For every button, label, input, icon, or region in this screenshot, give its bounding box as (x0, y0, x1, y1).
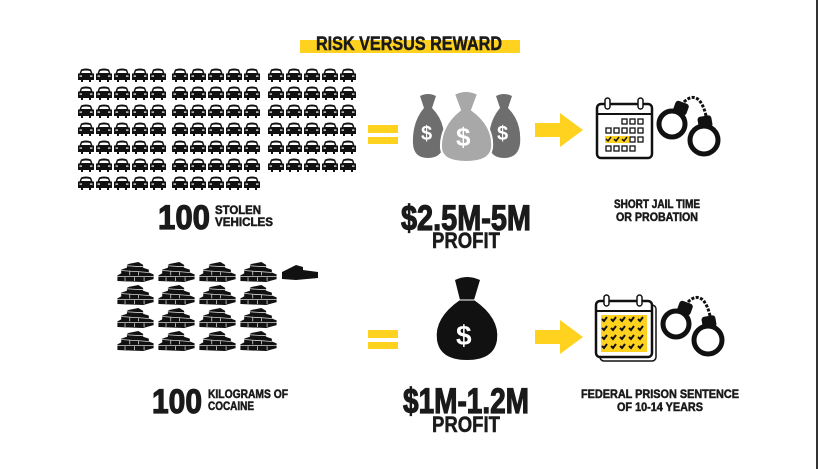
text: profit bottom (403, 382, 529, 437)
text: profit top: $2.5M-5M (401, 199, 531, 238)
icon: calendar full of checks + handcuffs (596, 295, 722, 361)
arrow bottom (535, 320, 583, 354)
icon grid: gold bars (cocaine) (117, 262, 318, 351)
label: 100 stolen vehicles: 100 (158, 199, 210, 237)
text: profit bottom: PROFIT (432, 412, 500, 437)
title: RISK VERSUS REWARD (316, 34, 502, 55)
equals sign bottom (368, 330, 398, 349)
text: profit top (401, 199, 531, 253)
text: short jail time: OR PROBATION (616, 212, 698, 224)
icon: three money bags (413, 91, 520, 162)
text: short jail time: SHORT JAIL TIME (614, 199, 700, 211)
label: 100 stolen vehicles: VEHICLES (215, 215, 273, 229)
label: 100 kilograms of cocaine: COCAINE (208, 399, 254, 413)
label: 100 kilograms of cocaine (152, 383, 288, 421)
text: profit top: PROFIT (432, 228, 500, 253)
label: 100 stolen vehicles (158, 199, 273, 237)
equals sign top (368, 125, 398, 144)
text: federal prison sentence: FEDERAL PRISON SENTENCE (581, 387, 739, 401)
label: 100 stolen vehicles: STOLEN (215, 203, 261, 217)
icon: single money bag: $ (456, 320, 472, 351)
icon grid: 100 stolen vehicles (78, 68, 356, 190)
label: 100 kilograms of cocaine: 100 (152, 383, 202, 421)
text: federal prison sentence: OF 10-14 YEARS (617, 400, 703, 414)
arrow top (535, 113, 583, 147)
icon: three money bags: $ (497, 123, 508, 145)
text: short jail time (614, 199, 700, 224)
icon: three money bags: $ (421, 123, 432, 145)
icon: calendar with few checks + handcuffs (597, 97, 718, 158)
icon: single money bag (437, 277, 497, 360)
icon: three money bags: $ (456, 122, 471, 152)
label: 100 kilograms of cocaine: KILOGRAMS OF (208, 387, 288, 401)
text: federal prison sentence (581, 387, 739, 414)
right border (816, 0, 818, 469)
text: profit bottom: $1M-1.2M (403, 382, 529, 421)
